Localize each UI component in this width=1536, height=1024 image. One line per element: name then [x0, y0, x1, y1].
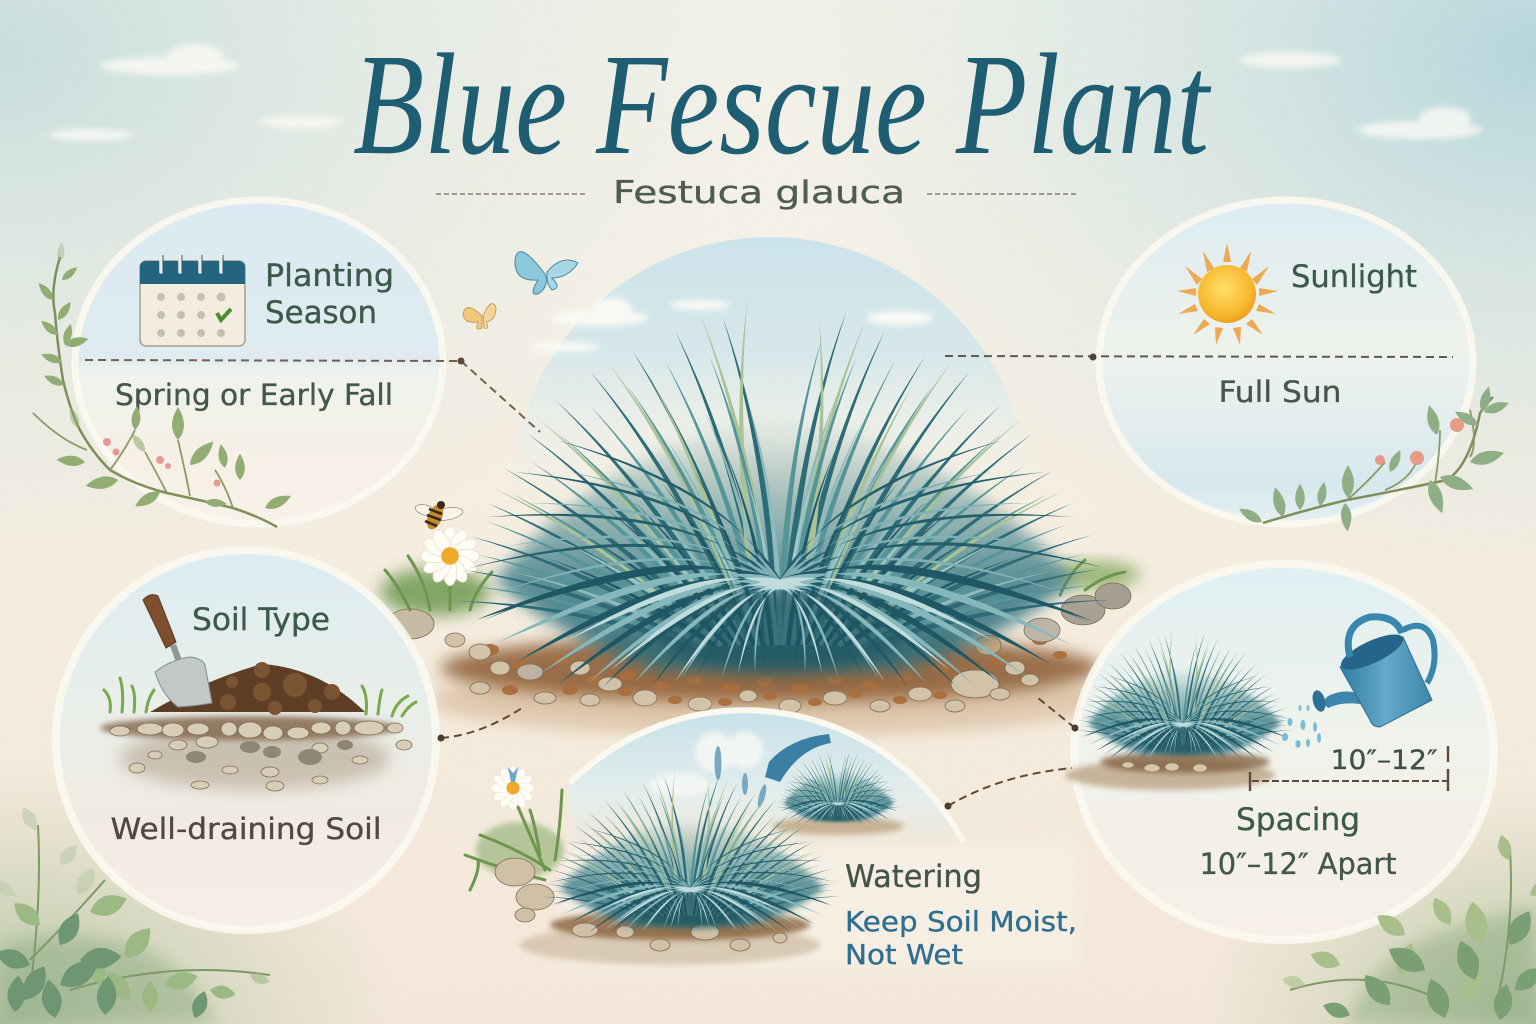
value: well-draining soil: Well-draining Soil	[110, 812, 382, 846]
icon: blue butterfly	[515, 252, 578, 294]
label: sunlight: Sunlight	[1291, 259, 1417, 295]
icon: trowel	[143, 595, 212, 707]
panel: soil type	[56, 550, 436, 930]
connector: plant to spacing	[1038, 698, 1078, 732]
small plant	[772, 747, 904, 835]
label: season: Season	[265, 295, 377, 331]
plant: spacing	[1065, 628, 1293, 790]
sky dome behind plant	[512, 237, 1028, 753]
connector: watering to spacing	[944, 768, 1072, 810]
value: 10-12 apart: 10″–12″ Apart	[1200, 847, 1396, 881]
subtitle: Festuca glauca	[613, 175, 905, 211]
label: watering: Watering	[845, 859, 982, 895]
label: planting: Planting	[265, 258, 394, 294]
panel: planting season	[75, 200, 443, 524]
value: full sun: Full Sun	[1218, 375, 1342, 409]
connector: planting	[85, 358, 540, 432]
icon: bee	[414, 501, 464, 532]
icon: watering can	[1282, 617, 1435, 748]
ground: soil	[100, 662, 416, 791]
vine: left	[33, 242, 293, 527]
foliage: bottom left corner	[0, 804, 271, 1024]
main plant: blue fescue	[456, 300, 1110, 740]
small clouds	[650, 732, 763, 797]
value: keep soil moist, not wet: Keep Soil Moist,	[845, 905, 1077, 938]
label: soil type: Soil Type	[192, 602, 330, 638]
plant: watering	[543, 769, 840, 956]
icon: watering nozzle	[714, 734, 831, 808]
clouds: sky	[48, 44, 1482, 141]
title: Blue Fescue Plant	[353, 25, 1212, 185]
value: keep soil moist, not wet	[845, 905, 1077, 971]
bed: watering stones	[495, 858, 820, 965]
icon: daisy and grass	[385, 526, 1125, 610]
ground: main gravel bed	[380, 561, 1140, 736]
label: spacing: Spacing	[1236, 802, 1360, 838]
connector: sunlight	[945, 354, 1453, 360]
panel: watering	[465, 710, 1080, 971]
panel: spacing	[1065, 564, 1494, 940]
value: spring or early fall: Spring or Early Fall	[115, 378, 393, 412]
vine: right	[1237, 385, 1510, 532]
icon: sun	[1177, 243, 1278, 345]
value: keep soil moist, not wet: Not Wet	[845, 938, 963, 971]
icon: calendar	[140, 255, 245, 346]
icon: orange butterfly	[463, 304, 496, 329]
dimension: 10-12 inches	[1250, 745, 1448, 791]
flowers and foliage	[465, 766, 564, 890]
panel: sunlight	[1099, 200, 1473, 524]
connector: soil	[438, 708, 522, 742]
dimension: 10-12 inches: 10″–12″	[1330, 745, 1438, 776]
foliage: bottom right corner	[1281, 833, 1536, 1024]
